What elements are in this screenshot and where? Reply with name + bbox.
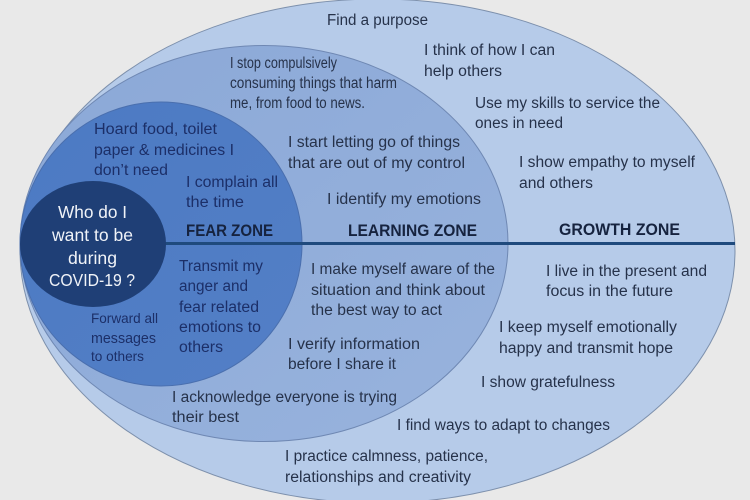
text: calmness: relationships and creativity (285, 469, 471, 486)
text: forward messages: messages (91, 331, 156, 347)
text: verify information (288, 336, 420, 373)
text: empathy (519, 154, 696, 192)
centre question (49, 202, 135, 290)
text: identify emotions: I identify my emotions (327, 191, 481, 208)
centre question: during (68, 248, 117, 268)
growth zone texts (285, 12, 707, 486)
text: transmit anger (179, 258, 263, 356)
text: use skills: Use my skills to service the (475, 95, 660, 112)
fear zone texts (91, 121, 278, 364)
text: letting go: that are out of my control (288, 155, 465, 172)
heading: growth zone: GROWTH ZONE (559, 221, 680, 239)
text: transmit anger: fear related (179, 299, 259, 316)
text: hoard food: paper & medicines I (94, 142, 234, 159)
text: use skills: ones in need (475, 115, 563, 132)
text: verify information: I verify information (288, 336, 420, 353)
text: aware of situation (311, 261, 495, 319)
learning zone texts (172, 55, 495, 426)
text: gratefulness: I show gratefulness (481, 374, 615, 391)
text: help others (424, 42, 555, 80)
text: hoard food (94, 121, 234, 179)
text: forward messages (91, 310, 158, 364)
text: letting go: I start letting go of things (288, 134, 460, 151)
text: purpose: Find a purpose (327, 12, 428, 29)
text: transmit anger: emotions to (179, 319, 261, 336)
text: hoard food: don’t need (94, 162, 168, 179)
text: complain: the time (186, 194, 244, 211)
text: transmit anger: Transmit my (179, 258, 263, 275)
text: emotionally happy: happy and transmit hope (499, 340, 673, 357)
fear zone circle (20, 102, 302, 386)
text: stop consuming: consuming things that harm (230, 75, 397, 92)
text: live in present (546, 263, 707, 300)
text: complain: I complain all (186, 174, 278, 191)
heading: fear zone: FEAR ZONE (186, 222, 273, 240)
text: acknowledge: I acknowledge everyone is trying (172, 389, 397, 406)
text: emotionally happy: I keep myself emotionally (499, 319, 677, 336)
text: acknowledge (172, 389, 397, 426)
text: help others: help others (424, 63, 502, 80)
text: verify information: before I share it (288, 356, 397, 373)
text: help others: I think of how I can (424, 42, 555, 59)
text: acknowledge: their best (172, 409, 240, 426)
text: aware of situation: situation and think about (311, 282, 486, 299)
text: forward messages: Forward all (91, 310, 158, 326)
heading: learning zone: LEARNING ZONE (348, 222, 477, 240)
text: calmness: I practice calmness, patience, (285, 448, 488, 465)
text: stop consuming: I stop compulsively (230, 55, 337, 72)
text: aware of situation: the best way to act (311, 302, 443, 319)
centre question: COVID-19 ? (49, 270, 135, 290)
text: adapt to changes: I find ways to adapt to changes (397, 417, 610, 434)
text: hoard food: Hoard food, toilet (94, 121, 218, 138)
text: live in present: focus in the future (546, 283, 673, 300)
learning zone ellipse (20, 46, 508, 442)
centre question: Who do I (58, 202, 127, 222)
centre ellipse (20, 181, 166, 307)
text: calmness (285, 448, 488, 486)
text: forward messages: to others (91, 348, 144, 364)
text: letting go (288, 134, 465, 172)
text: transmit anger: others (179, 339, 223, 356)
text: empathy: and others (519, 175, 593, 192)
text: stop consuming (230, 55, 397, 112)
text: live in present: I live in the present and (546, 263, 707, 280)
text: stop consuming: me, from food to news. (230, 95, 365, 112)
divider line (165, 242, 735, 245)
centre question: want to be (51, 225, 133, 245)
text: empathy: I show empathy to myself (519, 154, 696, 171)
text: transmit anger: anger and (179, 278, 248, 295)
text: emotionally happy (499, 319, 677, 357)
text: use skills (475, 95, 660, 132)
text: complain (186, 174, 278, 211)
text: aware of situation: I make myself aware of the (311, 261, 495, 278)
